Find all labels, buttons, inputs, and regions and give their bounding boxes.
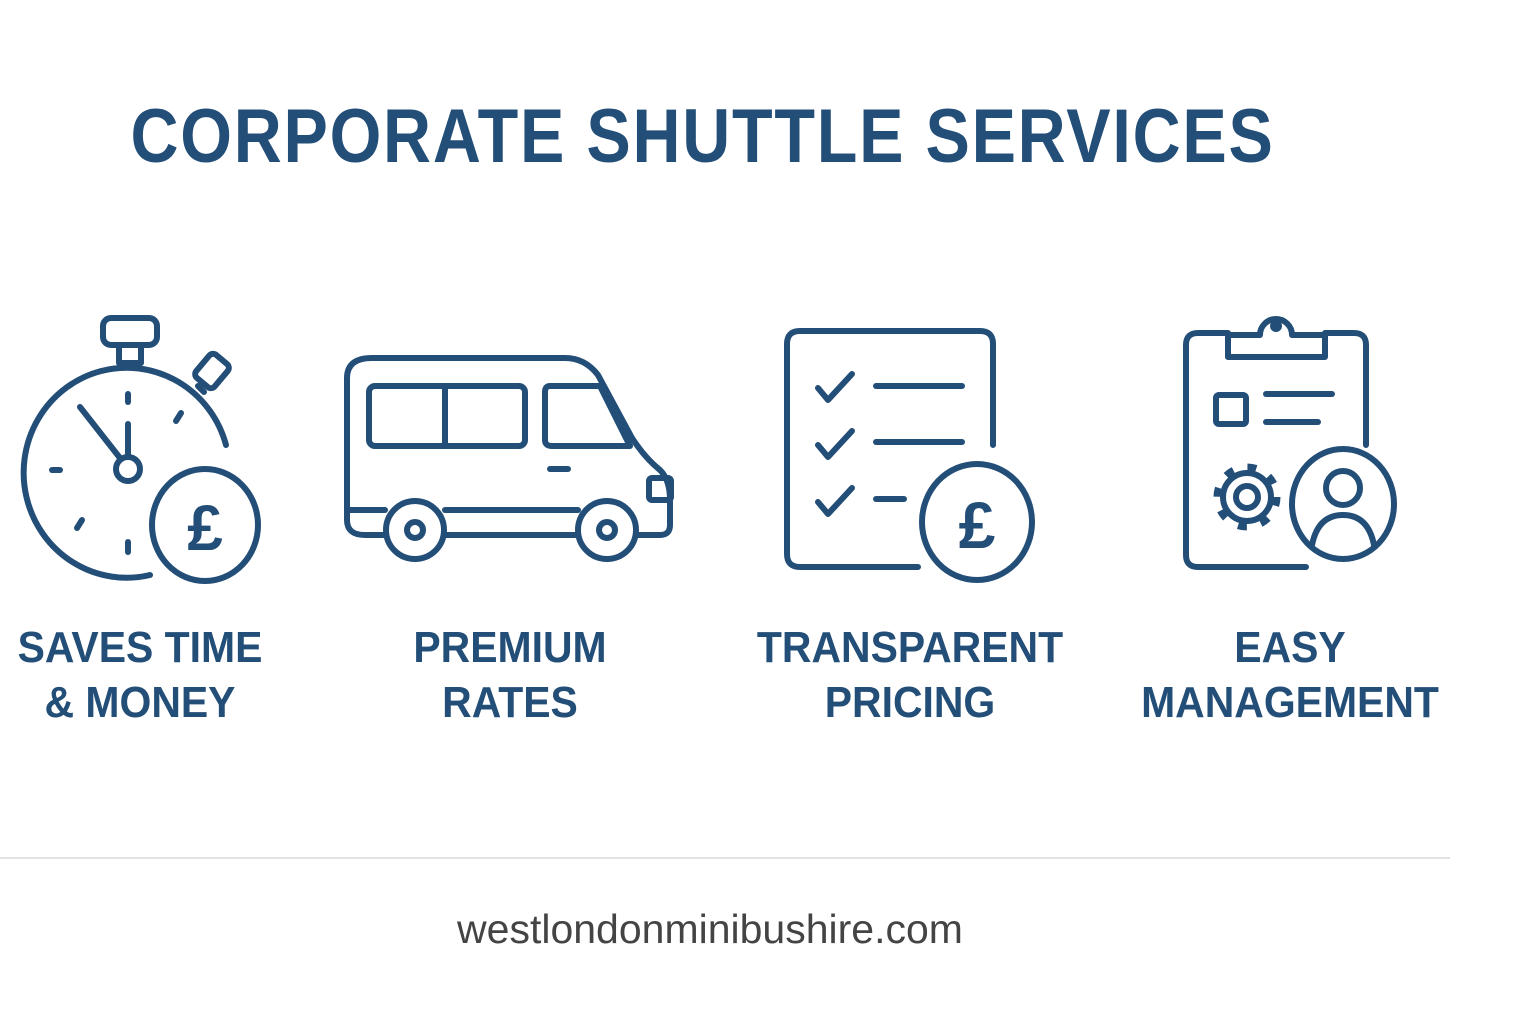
icon: van bbox=[347, 358, 671, 559]
label: easy management: EASY bbox=[1234, 623, 1346, 672]
icon: stopwatch with pound bbox=[24, 318, 258, 581]
label: transparent pricing: PRICING bbox=[825, 678, 995, 727]
divider bbox=[0, 857, 1450, 859]
label: saves time & money: & MONEY bbox=[45, 678, 235, 727]
label: premium rates: RATES bbox=[442, 678, 578, 727]
label: saves time & money bbox=[18, 623, 262, 727]
icon: checklist pricing: £ bbox=[959, 488, 996, 562]
label: easy management bbox=[1141, 623, 1439, 727]
icon: clipboard management bbox=[1186, 319, 1394, 567]
label: premium rates bbox=[413, 623, 607, 727]
label: easy management: MANAGEMENT bbox=[1141, 678, 1439, 727]
title: CORPORATE SHUTTLE SERVICES bbox=[130, 94, 1275, 179]
label: premium rates: PREMIUM bbox=[413, 623, 607, 672]
footer url: westlondonminibushire.com bbox=[457, 906, 963, 952]
icon: stopwatch with pound: £ bbox=[187, 492, 223, 564]
label: saves time & money: SAVES TIME bbox=[18, 623, 262, 672]
label: transparent pricing: TRANSPARENT bbox=[757, 623, 1063, 672]
icon: checklist pricing bbox=[787, 331, 1032, 580]
label: transparent pricing bbox=[757, 623, 1063, 727]
